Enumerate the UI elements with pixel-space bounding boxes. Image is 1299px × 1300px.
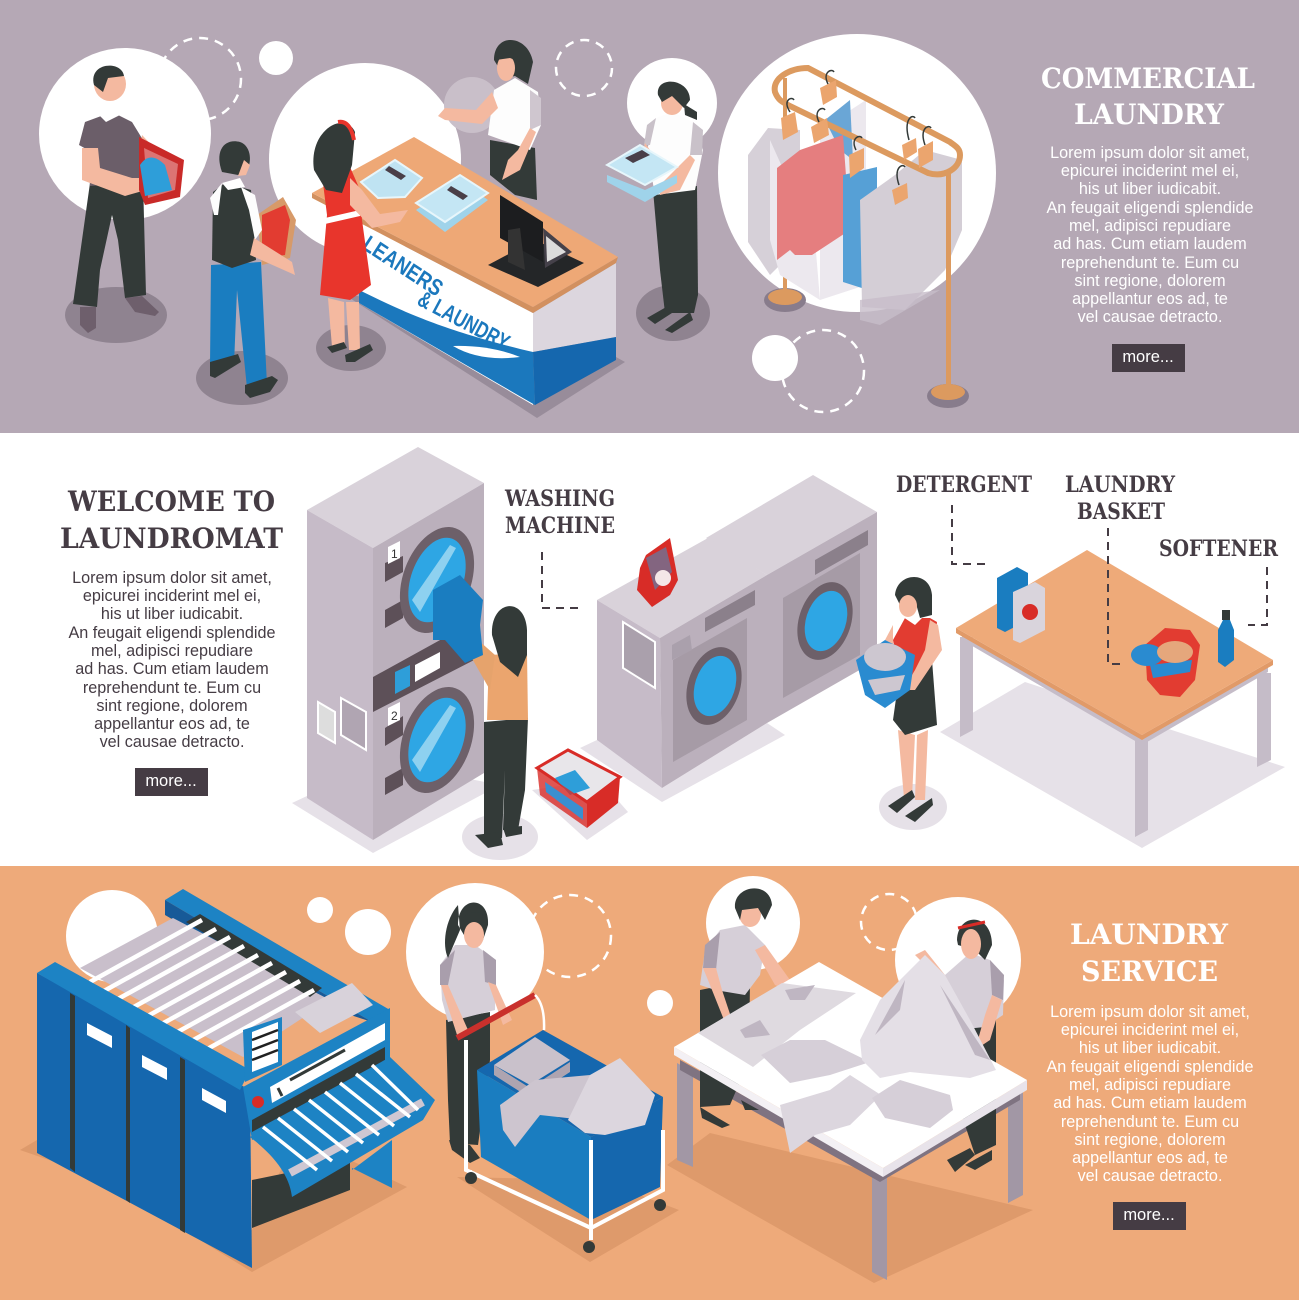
table with products bbox=[956, 550, 1273, 837]
figure: man with basket bbox=[65, 66, 184, 343]
text block: laundromat: epicurei inciderint mel ei, bbox=[83, 587, 261, 605]
text block: laundry service: his ut liber iudicabit. bbox=[1079, 1039, 1221, 1057]
table top with linen bbox=[674, 955, 1027, 1177]
labels bbox=[504, 472, 1279, 562]
button: more bbox=[1113, 1202, 1186, 1230]
panel: commercial laundry bbox=[0, 0, 1299, 433]
text block: commercial laundry: An feugait eligendi splendide bbox=[1046, 199, 1254, 217]
text block: commercial laundry: reprehendunt te. Eum cu bbox=[1061, 254, 1239, 272]
labels: WASHING bbox=[504, 486, 615, 512]
button: more bbox=[1112, 344, 1185, 372]
front load washers bbox=[597, 475, 877, 788]
figure: attendant carrying package bbox=[607, 82, 710, 341]
labels: SOFTENER bbox=[1159, 536, 1279, 562]
counter lettering bbox=[358, 230, 514, 355]
text block: laundry service: Lorem ipsum dolor sit amet, bbox=[1050, 1003, 1250, 1021]
text block: commercial laundry: Lorem ipsum dolor sit amet, bbox=[1050, 144, 1250, 162]
counter lettering: & LAUNDRY bbox=[414, 285, 514, 355]
text block: laundromat: reprehendunt te. Eum cu bbox=[83, 679, 261, 697]
counter lettering: LEANERS bbox=[358, 230, 448, 301]
figure: woman in red dress bbox=[313, 122, 408, 371]
labels: MACHINE bbox=[505, 513, 615, 539]
text block: laundry service: epicurei inciderint mel ei, bbox=[1061, 1021, 1239, 1039]
figure: worker left of table bbox=[700, 888, 807, 1128]
text block: laundromat: appellantur eos ad, te bbox=[94, 715, 250, 733]
floor shadows bbox=[292, 682, 1285, 860]
text block: commercial laundry bbox=[1046, 144, 1254, 326]
text block: commercial laundry: mel, adipisci repudiare bbox=[1069, 217, 1231, 235]
button: more: more... bbox=[145, 772, 197, 790]
text block: laundry service bbox=[1046, 1003, 1254, 1185]
red laundry basket bbox=[537, 750, 620, 828]
text block: laundromat bbox=[68, 569, 276, 751]
title: welcome to laundromat: WELCOME TO bbox=[67, 485, 275, 518]
decorative circles bbox=[66, 876, 1021, 1023]
text block: laundry service: mel, adipisci repudiare bbox=[1069, 1076, 1231, 1094]
text block: laundry service: appellantur eos ad, te bbox=[1072, 1149, 1228, 1167]
title: welcome to laundromat: LAUNDROMAT bbox=[60, 522, 283, 555]
text block: laundromat: sint regione, dolorem bbox=[96, 697, 248, 715]
text block: commercial laundry: his ut liber iudicabit. bbox=[1079, 180, 1221, 198]
flatwork ironer machine bbox=[37, 889, 435, 1268]
text block: laundry service: vel causae detracto. bbox=[1078, 1167, 1222, 1185]
text block: commercial laundry: ad has. Cum etiam laudem bbox=[1053, 235, 1247, 253]
figure: worker right of table bbox=[915, 920, 1004, 1172]
title: commercial laundry bbox=[1041, 62, 1255, 131]
text block: commercial laundry: vel causae detracto. bbox=[1078, 308, 1222, 326]
text block: commercial laundry: sint regione, dolorem bbox=[1074, 272, 1226, 290]
figure: woman with blue basket bbox=[856, 577, 942, 822]
figure: woman loading washer bbox=[433, 575, 528, 848]
text block: laundromat: An feugait eligendi splendide bbox=[68, 624, 276, 642]
title: welcome to laundromat bbox=[60, 485, 283, 555]
labels: DETERGENT bbox=[896, 472, 1033, 498]
title: laundry service: LAUNDRY bbox=[1070, 918, 1229, 951]
labels: BASKET bbox=[1077, 499, 1166, 525]
figure: man in vest with basket bbox=[196, 141, 296, 405]
button: more: more... bbox=[1122, 348, 1174, 366]
labels: LAUNDRY bbox=[1065, 472, 1175, 498]
panel: welcome to laundromat bbox=[0, 433, 1299, 866]
clothes rack bbox=[748, 68, 969, 408]
text block: laundromat: his ut liber iudicabit. bbox=[101, 605, 243, 623]
button: more bbox=[135, 768, 208, 796]
folding table bbox=[677, 1060, 1023, 1280]
panel: laundry service bbox=[0, 866, 1299, 1300]
packages bbox=[361, 160, 488, 232]
button: more: more... bbox=[1123, 1206, 1175, 1224]
title: laundry service bbox=[1070, 918, 1229, 988]
stacked washer dryer bbox=[307, 447, 488, 840]
stacked washer dryer: 1 bbox=[391, 547, 398, 561]
text block: laundry service: reprehendunt te. Eum cu bbox=[1061, 1113, 1239, 1131]
text block: commercial laundry: appellantur eos ad, te bbox=[1072, 290, 1228, 308]
floor shadows bbox=[20, 1130, 1033, 1283]
cash register bbox=[488, 195, 584, 287]
text block: laundromat: ad has. Cum etiam laudem bbox=[75, 660, 269, 678]
text block: laundromat: vel causae detracto. bbox=[100, 733, 244, 751]
title: laundry service: SERVICE bbox=[1081, 955, 1218, 988]
text block: laundry service: ad has. Cum etiam laudem bbox=[1053, 1094, 1247, 1112]
text block: laundry service: An feugait eligendi splendide bbox=[1046, 1058, 1254, 1076]
text block: laundromat: mel, adipisci repudiare bbox=[91, 642, 253, 660]
stacked washer dryer: 2 bbox=[391, 709, 398, 723]
title: commercial laundry: COMMERCIAL bbox=[1041, 62, 1255, 95]
decorative circles bbox=[39, 34, 996, 412]
text block: laundry service: sint regione, dolorem bbox=[1074, 1131, 1226, 1149]
text block: commercial laundry: epicurei inciderint mel ei, bbox=[1061, 162, 1239, 180]
title: commercial laundry: LAUNDRY bbox=[1074, 98, 1225, 131]
text block: laundromat: Lorem ipsum dolor sit amet, bbox=[72, 569, 272, 587]
figure: worker pushing cart bbox=[440, 902, 544, 1163]
figure: attendant behind counter bbox=[438, 40, 541, 200]
laundry cart bbox=[465, 1030, 666, 1253]
reception counter bbox=[312, 137, 625, 418]
callout lines bbox=[542, 505, 1267, 664]
